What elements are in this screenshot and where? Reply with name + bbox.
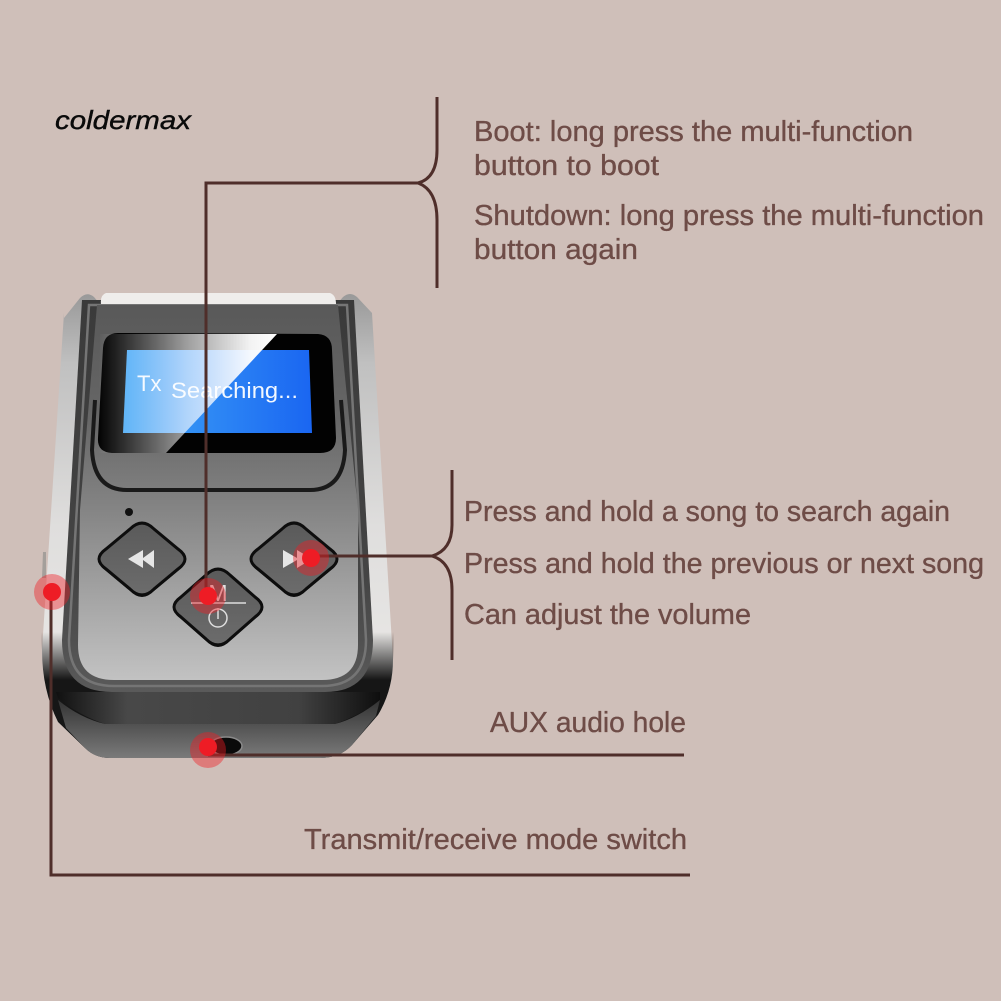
text block: boot and shutdown: Shutdown: long press the multi-function (474, 200, 984, 232)
text block: song controls: Press and hold the previous or next song (464, 548, 984, 580)
leader lines and brackets (51, 97, 690, 875)
text block: boot and shutdown: button again (474, 234, 638, 266)
text block: boot and shutdown (474, 116, 984, 266)
marker: mode switch (34, 574, 70, 610)
song bracket (432, 470, 452, 660)
text block: song controls: Press and hold a song to search again (464, 496, 950, 528)
device body (42, 294, 393, 758)
lower corner shading (41, 632, 394, 758)
top edge highlight (101, 293, 336, 304)
audio jack (210, 737, 242, 755)
label: aux audio hole: AUX audio hole (490, 707, 686, 739)
indicator dot (125, 508, 133, 516)
lower base plate (58, 700, 380, 758)
screen text (137, 371, 298, 403)
side switch (42, 552, 46, 578)
previous button (99, 523, 185, 597)
red markers (34, 540, 329, 768)
dark side ring (62, 300, 373, 692)
screen (123, 350, 312, 433)
ring highlight stripe (69, 305, 366, 686)
multi-function button: M (208, 580, 228, 606)
switch leader (51, 592, 690, 875)
text block: boot and shutdown: button to boot (474, 150, 659, 182)
logo: coldermax: coldermax (55, 105, 192, 135)
label: transmit/receive mode switch: Transmit/receive mode switch (304, 824, 687, 856)
marker: next button (293, 540, 329, 576)
screen bezel (98, 333, 336, 453)
upper base band (56, 692, 380, 724)
multi-function button (174, 569, 262, 647)
face panel (78, 305, 358, 680)
marker: multi-function button (190, 578, 226, 614)
screen glare (98, 334, 277, 453)
screen text: Tx (137, 371, 161, 396)
next button (251, 523, 337, 597)
marker: aux hole (190, 732, 226, 768)
power bracket (418, 97, 437, 288)
next button leader (311, 554, 432, 558)
aux leader (208, 754, 684, 756)
text block: song controls (464, 496, 984, 631)
text block: boot and shutdown: Boot: long press the multi-function (474, 116, 913, 148)
text block: song controls: Can adjust the volume (464, 599, 751, 631)
device illustration (41, 293, 394, 758)
screen text: Searching... (171, 378, 298, 403)
screen hood (92, 400, 345, 490)
power button leader (206, 183, 418, 596)
